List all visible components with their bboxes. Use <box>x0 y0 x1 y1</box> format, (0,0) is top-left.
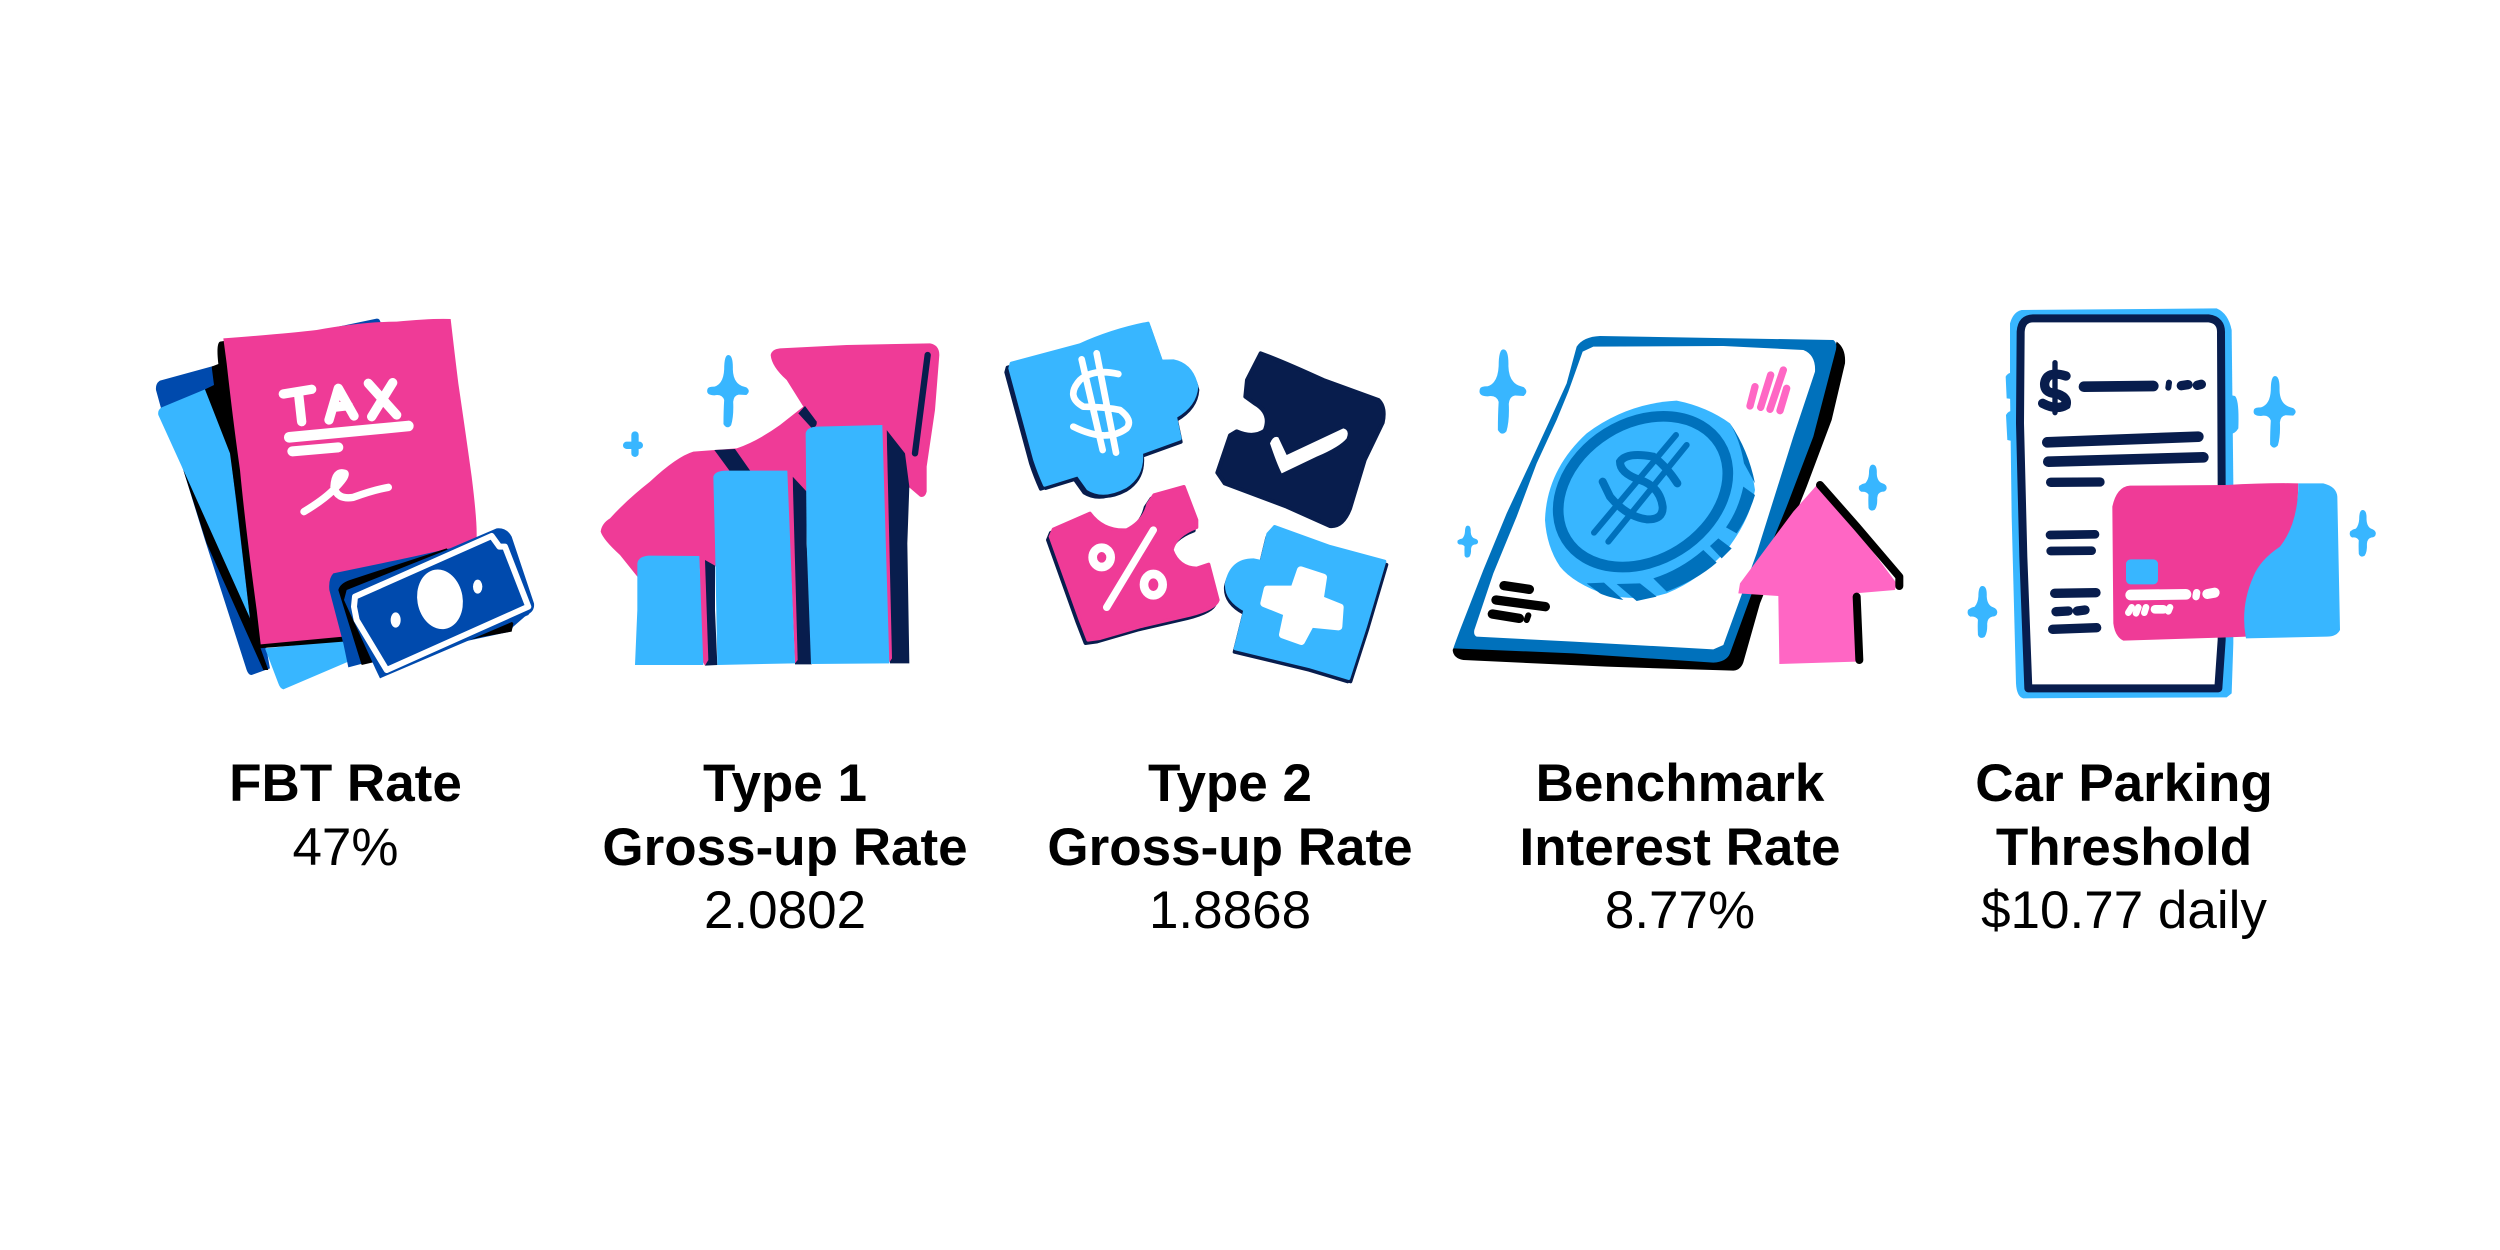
label: Car Parking Threshold $10.77 daily: Car Parking <box>1975 754 2273 813</box>
label: Type 2 Gross-up Rate 1.8868 <box>1047 754 1413 940</box>
pink bar sides <box>699 556 708 666</box>
icon: phone receipt and credit card <box>1968 308 2376 698</box>
label: Type 1 Gross-up Rate 2.0802 <box>602 754 968 940</box>
panel: Type 2 Gross-up Rate <box>1006 323 1413 940</box>
piece: dollar <box>1006 323 1198 497</box>
panel: Type 1 Gross-up Rate <box>601 343 968 940</box>
label: Car Parking Threshold $10.77 daily <box>1975 754 2273 940</box>
panel: Car Parking Threshold <box>1968 308 2376 940</box>
label: Type 1 Gross-up Rate 2.0802: 2.0802 <box>704 881 866 940</box>
label: FBT Rate 47% <box>229 754 462 877</box>
label: Type 2 Gross-up Rate 1.8868: 1.8868 <box>1149 881 1311 940</box>
label: Car Parking Threshold $10.77 daily: $10.77 daily <box>1981 881 2267 940</box>
label: Type 2 Gross-up Rate 1.8868: Type 2 <box>1148 754 1312 813</box>
banknote <box>329 528 534 667</box>
icon: rising bars with arrow <box>601 343 939 666</box>
label: FBT Rate 47%: 47% <box>292 818 399 877</box>
label: Type 1 Gross-up Rate 2.0802: Type 1 <box>703 754 867 813</box>
coin <box>1530 386 1756 601</box>
icon: coin card and up arrow <box>1453 336 1899 671</box>
label: Benchmark Interest Rate 8.77%: Interest Rate <box>1519 818 1841 877</box>
label: Type 1 Gross-up Rate 2.0802: Gross-up Rate <box>602 818 968 877</box>
label: Benchmark Interest Rate 8.77% <box>1519 754 1841 940</box>
blue bars <box>635 556 703 665</box>
label: Benchmark Interest Rate 8.77%: Benchmark <box>1536 754 1825 813</box>
sparkles <box>2254 376 2296 448</box>
piece: check <box>1217 353 1384 526</box>
piece: plus <box>1226 527 1387 682</box>
phone <box>2006 308 2239 698</box>
panel: FBT Rate <box>156 319 534 877</box>
label: Type 2 Gross-up Rate 1.8868: Gross-up Rate <box>1047 818 1413 877</box>
sparkles <box>707 355 749 427</box>
icon: tax document and banknote <box>156 319 534 689</box>
sparkles <box>1479 349 1526 434</box>
panel: Benchmark Interest Rate <box>1453 336 1899 940</box>
icon: jigsaw puzzle pieces <box>1006 323 1387 682</box>
navy bar sides <box>705 560 717 666</box>
piece: percent <box>1048 487 1218 643</box>
pink sheet <box>223 319 477 644</box>
label: FBT Rate 47%: FBT Rate <box>229 754 462 813</box>
arrow <box>1738 483 1899 664</box>
credit card <box>2112 483 2340 641</box>
label: Car Parking Threshold $10.77 daily: Threshold <box>1996 818 2252 877</box>
label: Benchmark Interest Rate 8.77%: 8.77% <box>1605 881 1755 940</box>
